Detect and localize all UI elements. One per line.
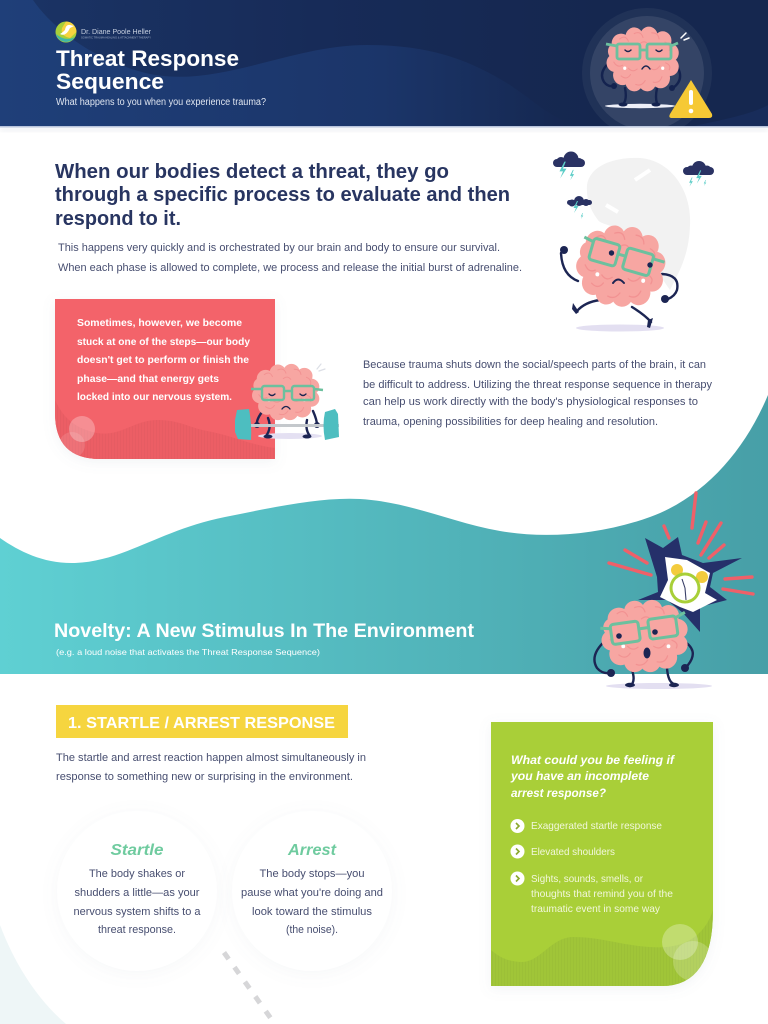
teal wave band <box>0 395 768 674</box>
logo: Dr. Diane Poole Heller <box>81 27 151 36</box>
callout text <box>77 318 251 403</box>
circle: arrest <box>232 811 392 971</box>
circle: startle: shudders a little—as your <box>74 887 200 899</box>
pale corner curve <box>0 925 66 1024</box>
bullet icons <box>510 819 524 886</box>
icon: running brain with clouds <box>553 152 714 332</box>
subtitle: What happens to you when you experience trauma? <box>56 97 267 108</box>
circle: startle: threat response. <box>98 924 176 936</box>
circle: arrest: Arrest <box>287 842 337 859</box>
intro text: This happens very quickly and is orchestrated by our brain and body to ensure our survival. <box>58 242 500 254</box>
bullet list <box>531 820 673 915</box>
novelty heading: Novelty: A New Stimulus In The Environment <box>54 621 475 642</box>
title <box>56 46 239 94</box>
panel question: arrest response? <box>511 788 606 800</box>
body paragraph: can help us work directly with the body's physiological responses to <box>363 396 698 408</box>
icon: brain lifting barbell <box>235 364 339 440</box>
callout text: Sometimes, however, we become <box>77 318 243 329</box>
panel: red callout <box>55 299 275 459</box>
section intro: response to something new or surprising in the environment. <box>56 771 353 783</box>
section intro: The startle and arrest reaction happen almost simultaneously in <box>56 752 366 764</box>
icon: surprised brain <box>594 600 712 689</box>
main heading: When our bodies detect a threat, they go <box>55 161 449 183</box>
main heading: respond to it. <box>55 208 181 230</box>
section label: startle / arrest <box>56 705 348 738</box>
icon: brain with warning sign <box>582 8 712 138</box>
logo: SOMATIC TRAUMA HEALING & ATTACHMENT THERAPY <box>81 36 151 40</box>
circle: startle: The body shakes or <box>89 868 185 880</box>
bullet list: Exaggerated startle response <box>531 820 662 832</box>
novelty note: (e.g. a loud noise that activates the Threat Response Sequence) <box>56 647 320 657</box>
circle: arrest: The body stops—you <box>260 868 364 880</box>
body paragraph: trauma, opening possibilities for deep healing and resolution. <box>363 416 658 428</box>
bullet list: traumatic event in some way <box>531 903 661 915</box>
intro text <box>58 242 522 274</box>
circle: startle: nervous system shifts to a <box>74 906 201 918</box>
header band <box>0 0 768 132</box>
main heading <box>55 161 510 230</box>
callout text: stuck at one of the steps—our body <box>77 337 251 348</box>
circle: arrest: look toward the stimulus <box>252 906 373 918</box>
body paragraph <box>363 359 712 428</box>
title: Sequence <box>56 69 164 94</box>
circle: arrest: pause what you're doing and <box>241 887 383 899</box>
logo <box>56 22 151 42</box>
section label: startle / arrest: 1. STARTLE / ARREST RESPONSE <box>68 715 335 732</box>
callout text: locked into our nervous system. <box>77 392 232 403</box>
intro text: When each phase is allowed to complete, we process and release the initial burst of adrenaline. <box>58 262 522 274</box>
circle: arrest: (the noise). <box>286 924 338 936</box>
bullet list: Elevated shoulders <box>531 846 615 858</box>
bullet list: thoughts that remind you of the <box>531 888 673 900</box>
icon: alarm clock burst with rays <box>609 493 753 632</box>
bullet list: Sights, sounds, smells, or <box>531 873 643 885</box>
panel question: you have an incomplete <box>510 771 650 783</box>
body paragraph: be difficult to address. Utilizing the threat response sequence in therapy <box>363 379 712 391</box>
section intro <box>56 752 366 783</box>
panel question <box>510 755 675 800</box>
title: Threat Response <box>56 46 239 71</box>
main heading: through a specific process to evaluate and then <box>55 184 510 206</box>
circle: startle <box>57 811 217 971</box>
panel question: What could you be feeling if <box>511 755 675 767</box>
callout text: doesn't get to perform or finish the <box>77 355 250 366</box>
circle: startle: Startle <box>110 842 164 859</box>
body paragraph: Because trauma shuts down the social/speech parts of the brain, it can <box>363 359 706 371</box>
dashed arrow line <box>224 952 272 1020</box>
callout text: phase—and that energy gets <box>77 374 220 385</box>
panel: incomplete arrest response <box>491 722 713 986</box>
